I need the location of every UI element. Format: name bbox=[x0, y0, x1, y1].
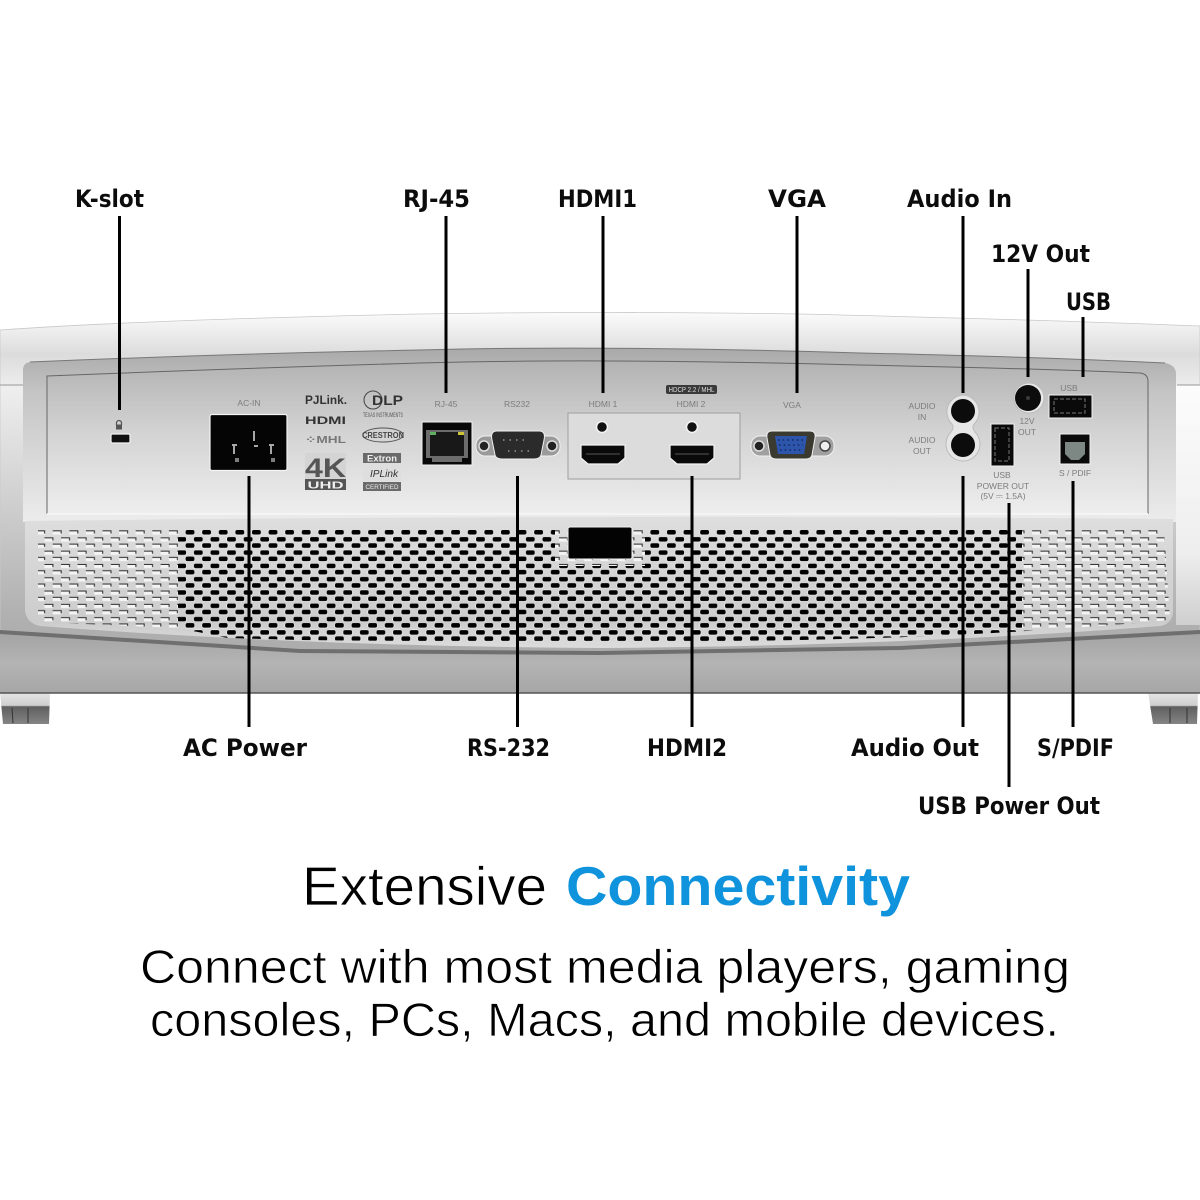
audio jacks bbox=[909, 395, 980, 461]
projector rear view bbox=[0, 312, 1200, 724]
Audio Out jack bbox=[951, 433, 975, 457]
HDMI2 port bbox=[670, 422, 714, 464]
callout: USB Power Out: USB Power Out bbox=[918, 792, 1100, 820]
AC power inlet: AC-IN bbox=[237, 398, 261, 408]
connector panel bbox=[47, 361, 1148, 514]
certification logos bbox=[305, 391, 404, 492]
audio jacks: OUT bbox=[913, 446, 931, 456]
certification logos: HDMI bbox=[305, 415, 346, 427]
callout: S/PDIF: S/PDIF bbox=[1037, 734, 1114, 762]
projector body bbox=[0, 312, 1200, 693]
Audio In jack bbox=[951, 399, 975, 423]
certification logos: CRESTRON bbox=[362, 431, 404, 440]
vent grille bbox=[25, 517, 1173, 650]
icon: right foot bbox=[1148, 692, 1198, 724]
S/PDIF port bbox=[1059, 434, 1091, 478]
connector recess bbox=[23, 348, 1176, 522]
12V out jack bbox=[1014, 383, 1044, 437]
description: consoles, PCs, Macs, and mobile devices. bbox=[150, 993, 1059, 1046]
certification logos: IPLink bbox=[370, 469, 399, 480]
lower body band bbox=[0, 634, 1200, 693]
AC power inlet bbox=[210, 398, 287, 470]
audio jacks: AUDIO bbox=[909, 401, 936, 411]
IR window bbox=[568, 527, 632, 559]
callout: 12V Out: 12V Out bbox=[991, 240, 1090, 268]
title: Connectivity bbox=[566, 855, 910, 917]
callout: RS-232: RS-232 bbox=[467, 734, 550, 762]
audio jacks: AUDIO bbox=[909, 435, 936, 445]
RJ-45 port: RJ-45 bbox=[435, 399, 458, 409]
HDMI plate bbox=[568, 385, 740, 479]
USB power out port: (5V ⎓ 1.5A) bbox=[980, 491, 1026, 501]
certification logos: 4K bbox=[305, 453, 347, 483]
callout: 12V Out bbox=[991, 240, 1090, 377]
VGA port bbox=[751, 400, 834, 459]
audio jacks: IN bbox=[918, 412, 926, 422]
callout: K-slot: K-slot bbox=[75, 185, 144, 213]
right side panel bbox=[1176, 385, 1200, 625]
S/PDIF port: S / PDIF bbox=[1059, 468, 1091, 478]
certification logos: TEXAS INSTRUMENTS bbox=[363, 413, 403, 419]
12V out jack: OUT bbox=[1018, 427, 1036, 437]
callout: VGA: VGA bbox=[768, 185, 826, 213]
description: Connect with most media players, gaming bbox=[140, 940, 1070, 993]
HDMI plate: HDMI 2 bbox=[677, 399, 706, 409]
USB power out port: USB bbox=[993, 470, 1011, 480]
callout: USB bbox=[1066, 288, 1111, 377]
HDMI plate: HDCP 2.2 / MHL bbox=[668, 387, 715, 394]
certification logos: PJLink. bbox=[305, 393, 347, 407]
RJ-45 port bbox=[422, 399, 472, 465]
certification logos: ⁘MHL bbox=[305, 435, 346, 446]
HDMI1 port bbox=[581, 422, 625, 464]
USB power out port: POWER OUT bbox=[977, 481, 1029, 491]
12V out jack: 12V bbox=[1019, 416, 1035, 426]
VGA port: VGA bbox=[783, 400, 801, 410]
USB port bbox=[1049, 383, 1092, 418]
certification logos: DLP bbox=[372, 392, 403, 408]
RS-232 port: RS232 bbox=[504, 399, 530, 409]
certification logos: UHD bbox=[308, 480, 344, 492]
callout: HDMI2: HDMI2 bbox=[647, 734, 727, 762]
callout: HDMI1: HDMI1 bbox=[558, 185, 637, 213]
icon: left foot bbox=[0, 692, 50, 724]
title: Extensive bbox=[302, 855, 547, 917]
callout: USB: USB bbox=[1066, 288, 1111, 316]
callout: AC Power: AC Power bbox=[183, 734, 307, 762]
HDMI plate: HDMI 1 bbox=[589, 399, 618, 409]
callout: Audio Out: Audio Out bbox=[851, 734, 979, 762]
title bbox=[302, 855, 910, 917]
RS-232 port bbox=[476, 399, 560, 459]
certification logos: Extron bbox=[367, 454, 397, 464]
callout: Audio In: Audio In bbox=[907, 185, 1012, 213]
description bbox=[140, 940, 1070, 1046]
USB power out port bbox=[977, 424, 1029, 501]
certification logos: CERTIFIED bbox=[366, 484, 399, 491]
USB port: USB bbox=[1060, 383, 1078, 393]
callout: RJ-45: RJ-45 bbox=[403, 185, 470, 213]
icon: k-slot bbox=[111, 420, 130, 443]
